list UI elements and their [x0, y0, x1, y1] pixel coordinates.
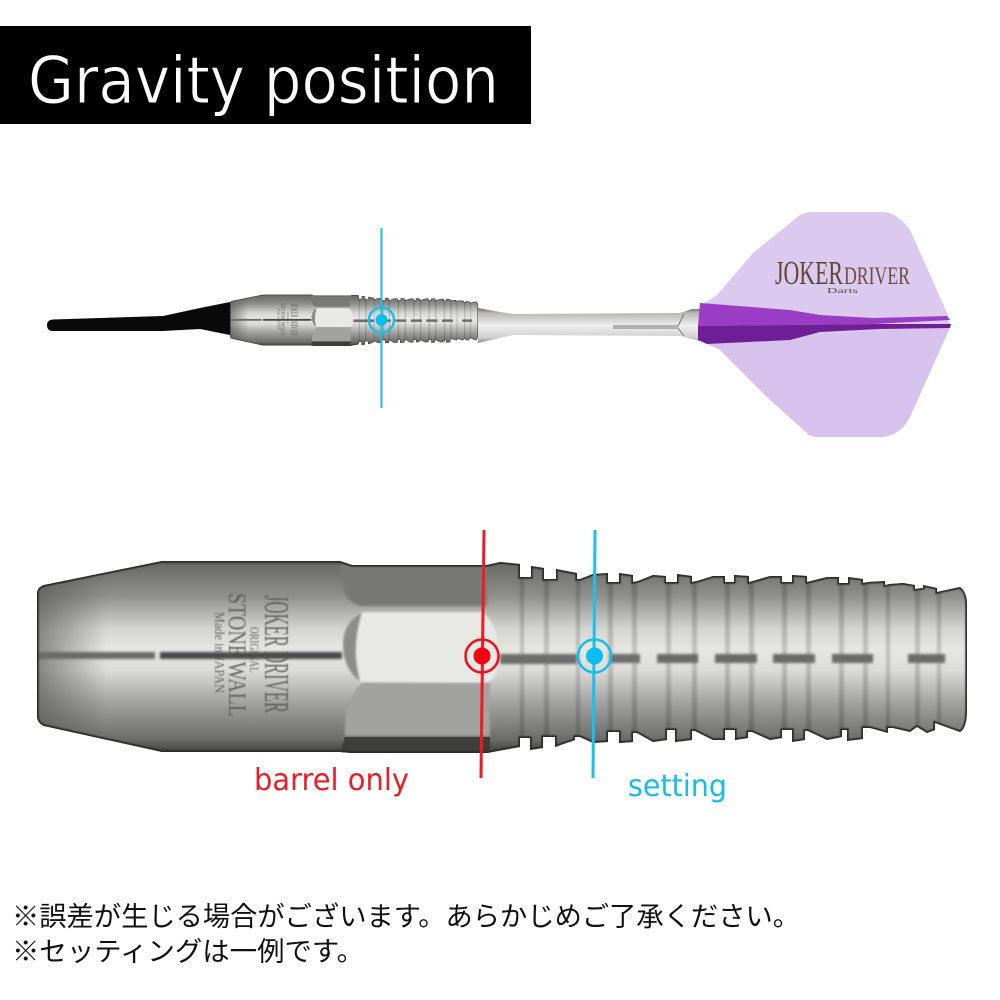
- dart shaft: [478, 308, 704, 343]
- footnotes: [12, 902, 800, 967]
- hex cut middle flat: [343, 612, 497, 684]
- dark silhouette edge: [37, 561, 967, 753]
- full dart illustration: [47, 212, 951, 437]
- label: barrel only: barrel only: [254, 763, 409, 798]
- title banner: Gravity position: [28, 44, 499, 119]
- flight logo: Darts: [827, 287, 859, 295]
- barrel engraving: STONE WALL: [223, 593, 250, 717]
- dart flight: [698, 212, 951, 437]
- barrel engraving: [211, 593, 296, 717]
- centre of gravity marker: setting: [578, 530, 611, 778]
- ring shading: [520, 560, 941, 755]
- hex cut bottom flat: [345, 683, 490, 736]
- barrel engraving: ORIGINAL: [247, 627, 262, 673]
- footnotes: ※セッティングは一例です。: [12, 937, 364, 967]
- centre reflection stripe: [37, 652, 945, 664]
- hex cut top flat: [340, 565, 487, 606]
- barrel engraving: Made in JAPAN: [211, 612, 226, 693]
- footnotes: ※誤差が生じる場合がございます。あらかじめご了承ください。: [12, 902, 800, 932]
- darker front face shading: [37, 555, 107, 760]
- dart barrel small: [228, 293, 480, 348]
- flight centre spine: [698, 303, 950, 326]
- flight logo: DRIVER: [844, 263, 910, 290]
- dart tip: [47, 302, 230, 335]
- centre of gravity marker: barrel only: [466, 530, 498, 778]
- centre of gravity marker: small dart: [369, 228, 394, 408]
- label: setting: setting: [628, 769, 727, 804]
- flight logo: JOKER: [775, 255, 843, 292]
- enlarged barrel: JOKER DRIVER: [257, 595, 296, 713]
- enlarged barrel: [30, 555, 975, 760]
